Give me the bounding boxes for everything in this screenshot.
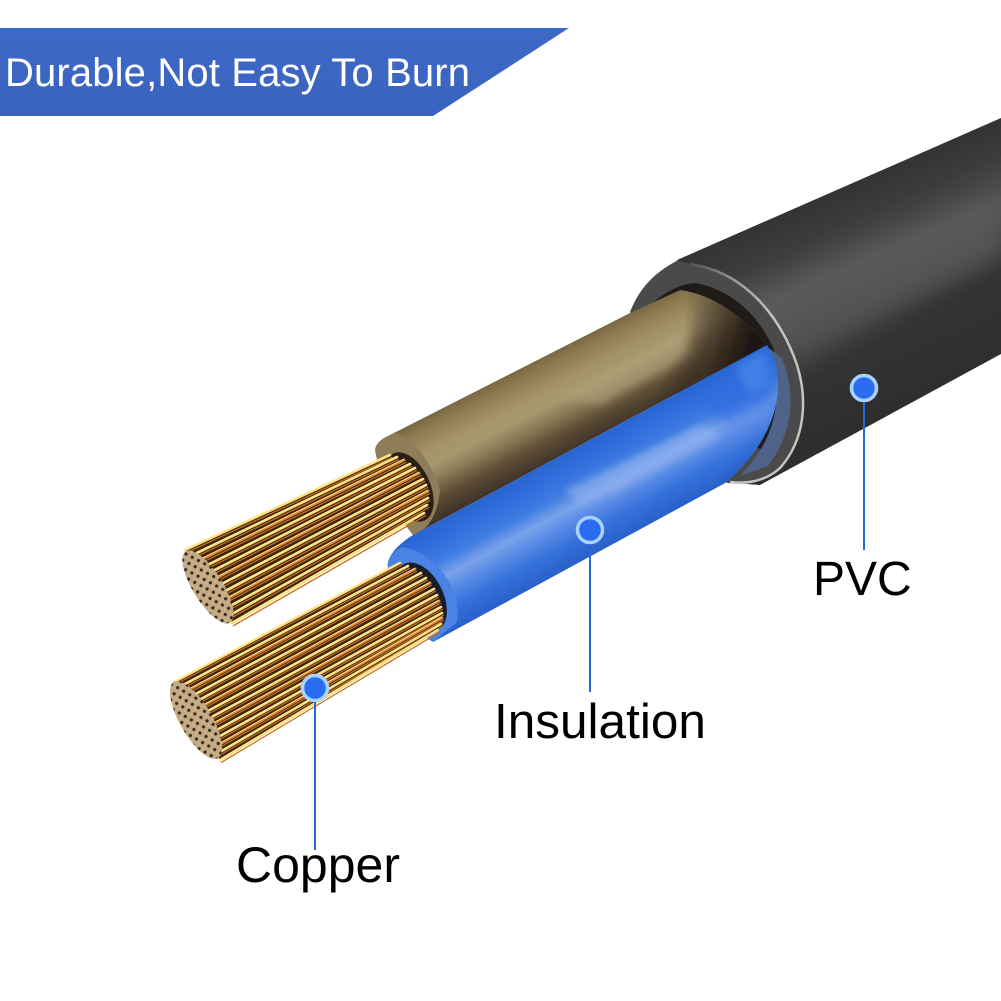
banner [0,28,569,116]
blue wire hole [385,554,457,640]
Insulation leader line [589,537,591,692]
lower strands [174,563,441,760]
copper wire lower [160,562,443,766]
Copper marker [302,676,328,700]
copper wire upper [173,454,430,631]
brown insulated wire [374,280,780,535]
brown sheath shadow near collar [666,292,767,400]
upper strands [185,455,428,623]
Insulation label: Insulation [494,694,706,749]
brown sheath highlight [560,335,695,405]
upper end face [173,543,243,631]
banner heading: Durable,Not Easy To Burn [5,51,470,95]
lower end face [160,674,232,766]
blue end ring [388,547,458,642]
brown wire hole [374,445,444,529]
Insulation marker [578,518,602,542]
PVC marker [852,376,876,400]
collar inner face [630,259,803,484]
callout: Insulation [494,518,706,749]
brown end ring [375,433,440,535]
callout: Copper [236,676,400,893]
blue sheath [388,345,778,642]
cable illustration [160,118,1001,766]
jacket body [677,118,1001,485]
PVC leader line [863,395,865,550]
blue insulated wire [385,345,800,642]
banner shape [0,28,569,116]
PVC label: PVC [813,553,912,606]
blue highlights [565,350,800,506]
Copper label: Copper [236,837,400,893]
callout: PVC [813,376,912,606]
jacket rim highlight [690,264,803,483]
jacket sheen band [774,224,998,369]
brown sheath [375,290,767,535]
Copper leader line [314,695,316,850]
PVC jacket [677,118,1001,485]
